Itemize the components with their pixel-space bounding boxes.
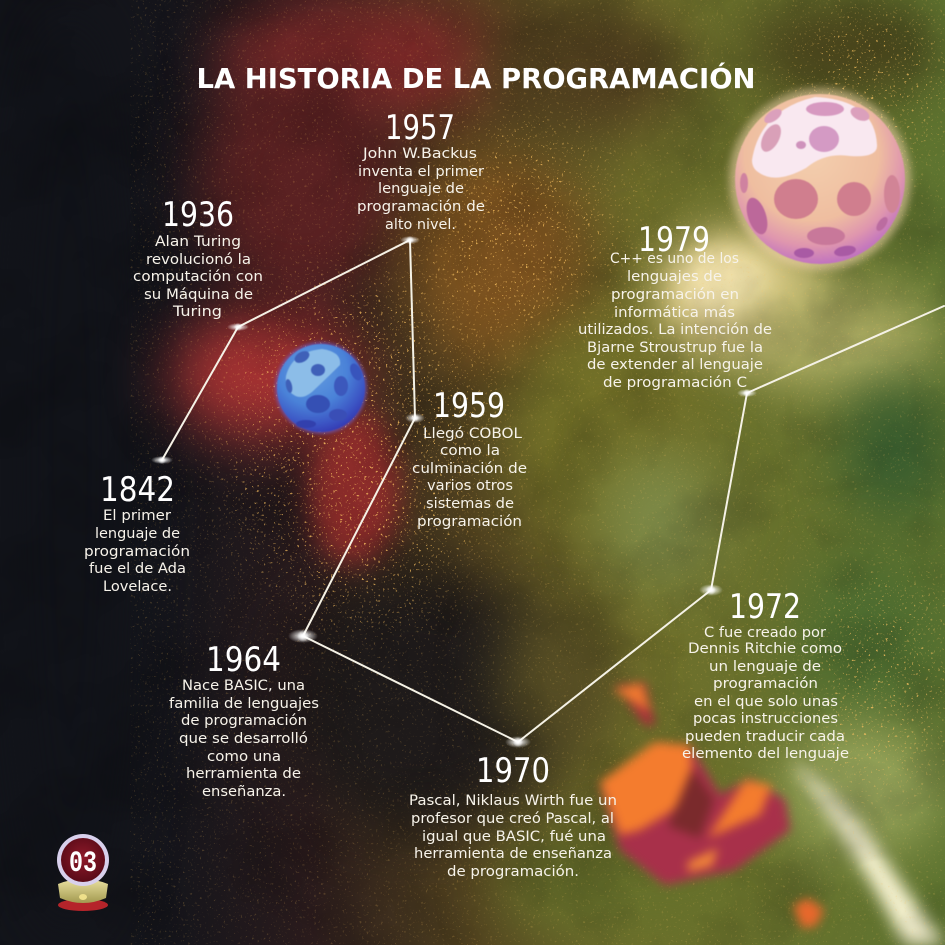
milestone: 1970: 1970 [476,751,550,791]
milestone: 1972: Dennis Ritchie como [688,641,842,657]
milestone: 1970: de programación. [447,864,579,880]
milestone: 1972: elemento del lenguaje [682,746,849,762]
milestone: 1970: Pascal, Niklaus Wirth fue un [409,793,617,809]
milestone: 1936 [133,195,263,320]
milestone: 1842 [84,470,190,595]
milestone: 1936: Turing [172,304,222,320]
milestone: 1957: alto nivel. [385,217,456,233]
badge: page number 03: 03 [69,847,97,881]
milestone: 1970: herramienta de enseñanza [414,846,612,862]
milestone: 1959: sistemas de [426,496,514,512]
milestone: 1972: pocas instrucciones [693,711,838,727]
milestone: 1979: de extender al lenguaje [587,357,763,373]
badge: page number 03 [57,834,109,911]
milestone: 1959: varios otros [427,478,513,494]
milestone: 1979: C++ es uno de los [610,251,739,267]
milestone: 1972: programación [713,676,818,692]
milestone: 1972: en el que solo unas [694,694,838,710]
milestone: 1842: lenguaje de [95,526,180,542]
milestone: 1842: fue el de Ada [89,561,186,577]
milestone: 1972: C fue creado por [704,625,826,641]
milestone: 1979: 1979 [638,220,710,260]
milestone: 1959: Llegó COBOL [423,426,522,442]
constellation stars [151,236,757,748]
milestone: 1842: programación [84,544,190,560]
milestone: 1936: revolucionó la [146,252,251,268]
milestone: 1957 [357,108,485,233]
milestone: 1959: culminación de [412,461,527,477]
constellation lines [162,240,944,742]
milestone: 1959 [412,386,527,530]
milestone: 1959: como la [440,443,500,459]
milestone: 1842: El primer [103,508,171,524]
milestone: 1957: inventa el primer [358,164,484,180]
milestone: 1964: Nace BASIC, una [182,678,305,694]
milestone: 1936: Alan Turing [155,234,241,250]
milestone: 1979: programación en [611,287,739,303]
milestone: 1979: utilizados. La intención de [578,322,772,338]
milestone: 1957: lenguaje de [378,181,464,197]
milestone: 1964: de programación [181,713,307,729]
milestone: 1936: su Máquina de [144,287,253,303]
milestone: 1964: familia de lenguajes [169,696,319,712]
milestone: 1970: profesor que creó Pascal, al [411,811,614,827]
milestone: 1972 [682,587,849,762]
milestone: 1972: pueden traducir cada [685,729,845,745]
planet: pink [729,88,911,270]
asteroids [600,682,824,928]
milestone: 1970: igual que BASIC, fué una [422,829,606,845]
milestone: 1972: un lenguaje de [709,659,821,675]
milestone: 1979 [578,220,772,391]
milestone: 1979: informática más [614,305,735,321]
milestone: 1964: enseñanza. [202,784,286,800]
milestone: 1957: programación de [357,199,485,215]
milestone: 1970 [409,751,617,880]
milestone: 1842: Lovelace. [103,579,172,595]
milestone: 1842: 1842 [100,470,175,510]
milestone: 1964 [169,640,319,800]
milestone: 1957: 1957 [385,108,455,148]
milestone: 1979: Bjarne Stroustrup fue la [587,340,763,356]
title: LA HISTORIA DE LA PROGRAMACIÓN [196,61,756,95]
milestone: 1979: de programación C [603,375,747,391]
milestone: 1959: 1959 [433,386,505,426]
planet: blue [275,342,367,434]
milestone: 1964: 1964 [206,640,281,680]
milestone: 1959: programación [417,514,522,530]
milestone: 1936: computación con [133,269,263,285]
milestone: 1936: 1936 [162,195,234,235]
milestone: 1964: como una [207,749,281,765]
milestone: 1964: herramienta de [186,766,301,782]
milestone: 1957: John W.Backus [362,146,477,162]
milestone: 1964: que se desarrolló [179,731,308,747]
milestone: 1979: lenguajes de [627,269,722,285]
milestone: 1972: 1972 [729,587,801,627]
